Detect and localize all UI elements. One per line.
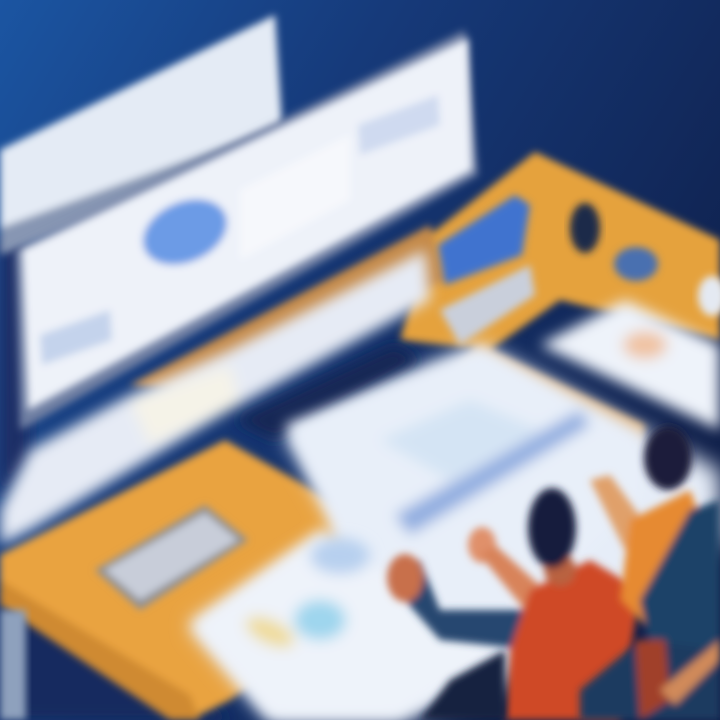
text block: screen lower left xyxy=(40,310,112,365)
icon: blue tablet xyxy=(438,195,535,345)
figure: rear person xyxy=(580,426,720,720)
panel: lower keyboard tray xyxy=(0,250,430,545)
icon: round device xyxy=(614,247,658,281)
dark gap under monitor xyxy=(235,345,420,440)
arm and hand xyxy=(395,560,535,650)
panel: right document sheet xyxy=(540,300,720,430)
chart: blue oval on screen xyxy=(133,187,237,277)
panel: main monitor xyxy=(22,38,472,410)
dark floor in lower center xyxy=(420,650,505,720)
torso xyxy=(505,560,640,720)
orange desk xyxy=(0,152,720,720)
icon: corner device xyxy=(698,276,720,316)
figure: front person xyxy=(387,488,640,720)
neck xyxy=(544,554,576,586)
panel: central document sheet xyxy=(285,348,640,640)
panel: monitor frame xyxy=(15,30,478,430)
panel: keyboard on desk xyxy=(95,505,248,610)
lower left floor xyxy=(0,590,230,720)
desk leg xyxy=(0,610,26,720)
sheet underlay joining the documents xyxy=(190,345,720,720)
panel: front document sheet xyxy=(190,530,500,720)
icon: dark cup xyxy=(570,203,600,253)
text block: screen upper right xyxy=(358,95,440,155)
head xyxy=(528,488,576,568)
lower left dark background xyxy=(0,240,30,500)
panel: back screen xyxy=(0,15,285,255)
